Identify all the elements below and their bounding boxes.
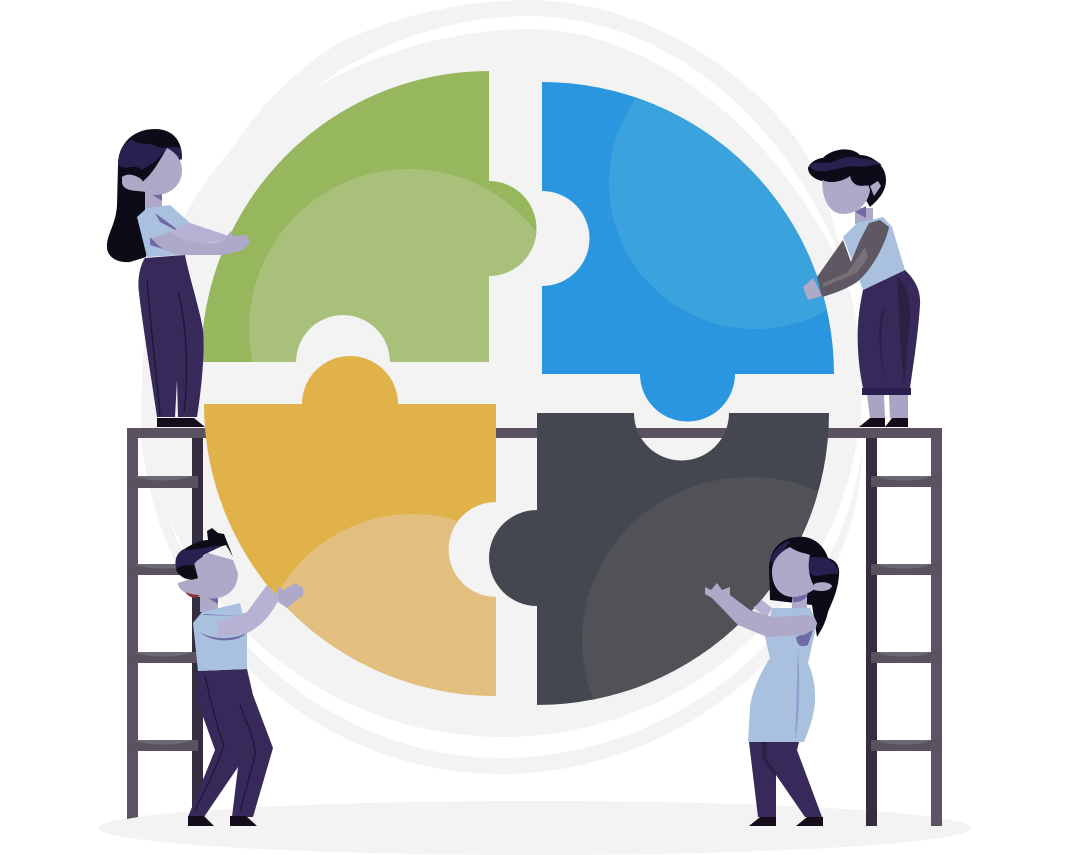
puzzle piece: blue	[542, 82, 834, 422]
scaffold platform beam	[127, 428, 942, 438]
puzzle piece: yellow	[204, 356, 496, 696]
person: woman bottom right	[705, 537, 839, 826]
person: woman top left	[107, 129, 250, 427]
person: man bottom left	[175, 528, 303, 826]
background circle with swooshes	[141, 0, 864, 774]
person: man top right	[803, 149, 920, 427]
right ladder	[866, 428, 942, 826]
floor shadow	[99, 801, 971, 855]
puzzle piece: dark grey	[489, 413, 829, 705]
left ladder	[127, 428, 203, 826]
puzzle piece: green	[203, 71, 536, 362]
